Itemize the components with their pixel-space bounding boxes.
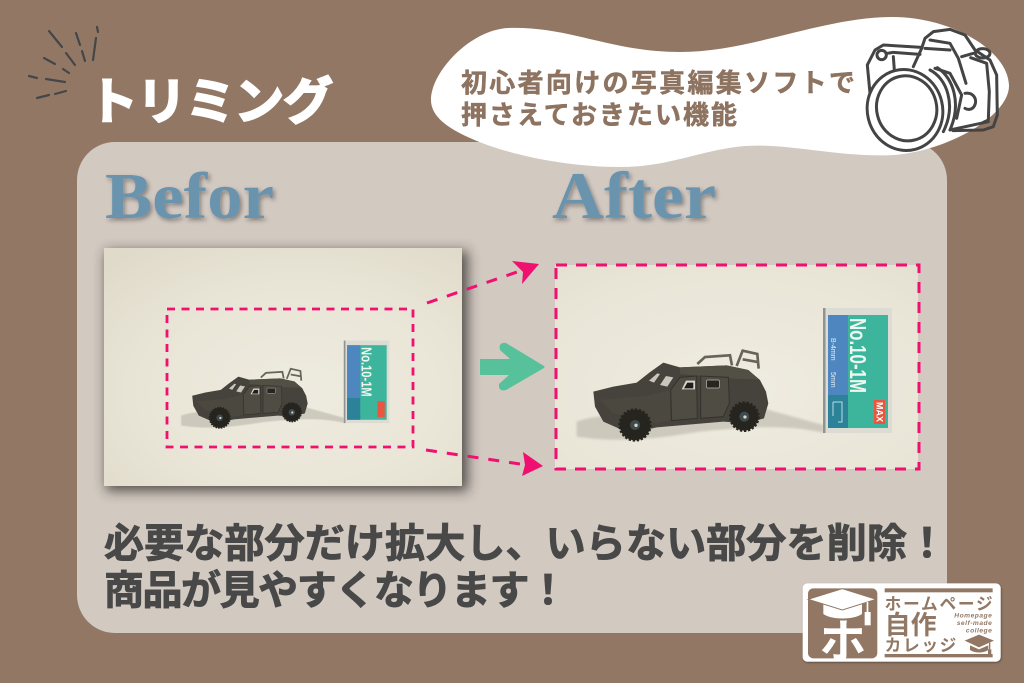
logo small cap	[965, 635, 994, 656]
stapler box	[823, 308, 892, 433]
stapler box: MAX	[874, 402, 884, 422]
arrow: green	[480, 343, 544, 390]
subtitle: 初心者向けの写真編集ソフトで	[461, 68, 855, 98]
logo mark: ホ	[819, 616, 866, 668]
logo: Homepage	[954, 613, 992, 620]
crop frame on before photo	[167, 309, 413, 447]
stapler box: B-4mm	[829, 338, 836, 361]
body text: 必要な部分だけ拡大し、いらない部分を削除！	[104, 522, 947, 566]
logo: self-made	[957, 620, 992, 627]
icon: spark lines	[29, 27, 98, 98]
after photo	[555, 265, 918, 469]
logo text: 自作	[885, 610, 937, 640]
title: トリミング	[88, 74, 333, 130]
logo: college	[966, 627, 992, 634]
subtitle: 押さえておきたい機能	[461, 100, 737, 130]
subtitle	[461, 68, 855, 130]
body text: 商品が見やすくなります！	[104, 569, 568, 613]
stapler box	[344, 341, 389, 423]
arrow: upper dashed	[427, 261, 539, 303]
logo text	[885, 594, 993, 655]
icon: camera	[859, 29, 997, 159]
logo text: ホームページ	[885, 594, 993, 613]
logo	[803, 583, 1001, 668]
logo text: カレッジ	[885, 636, 956, 655]
before photo	[104, 248, 468, 491]
logo mark	[808, 589, 876, 668]
arrow: lower dashed	[426, 450, 543, 476]
heading: After: After	[552, 159, 716, 233]
crop frame on after photo	[556, 265, 919, 469]
stapler box: 5mm	[829, 372, 836, 388]
body text	[104, 522, 947, 613]
stapler box: No.10-1M	[845, 318, 871, 393]
heading: Befor: Befor	[105, 160, 274, 233]
stapler box: No.10-1M	[358, 347, 375, 397]
main panel	[77, 142, 947, 633]
speech blob	[431, 17, 1009, 167]
